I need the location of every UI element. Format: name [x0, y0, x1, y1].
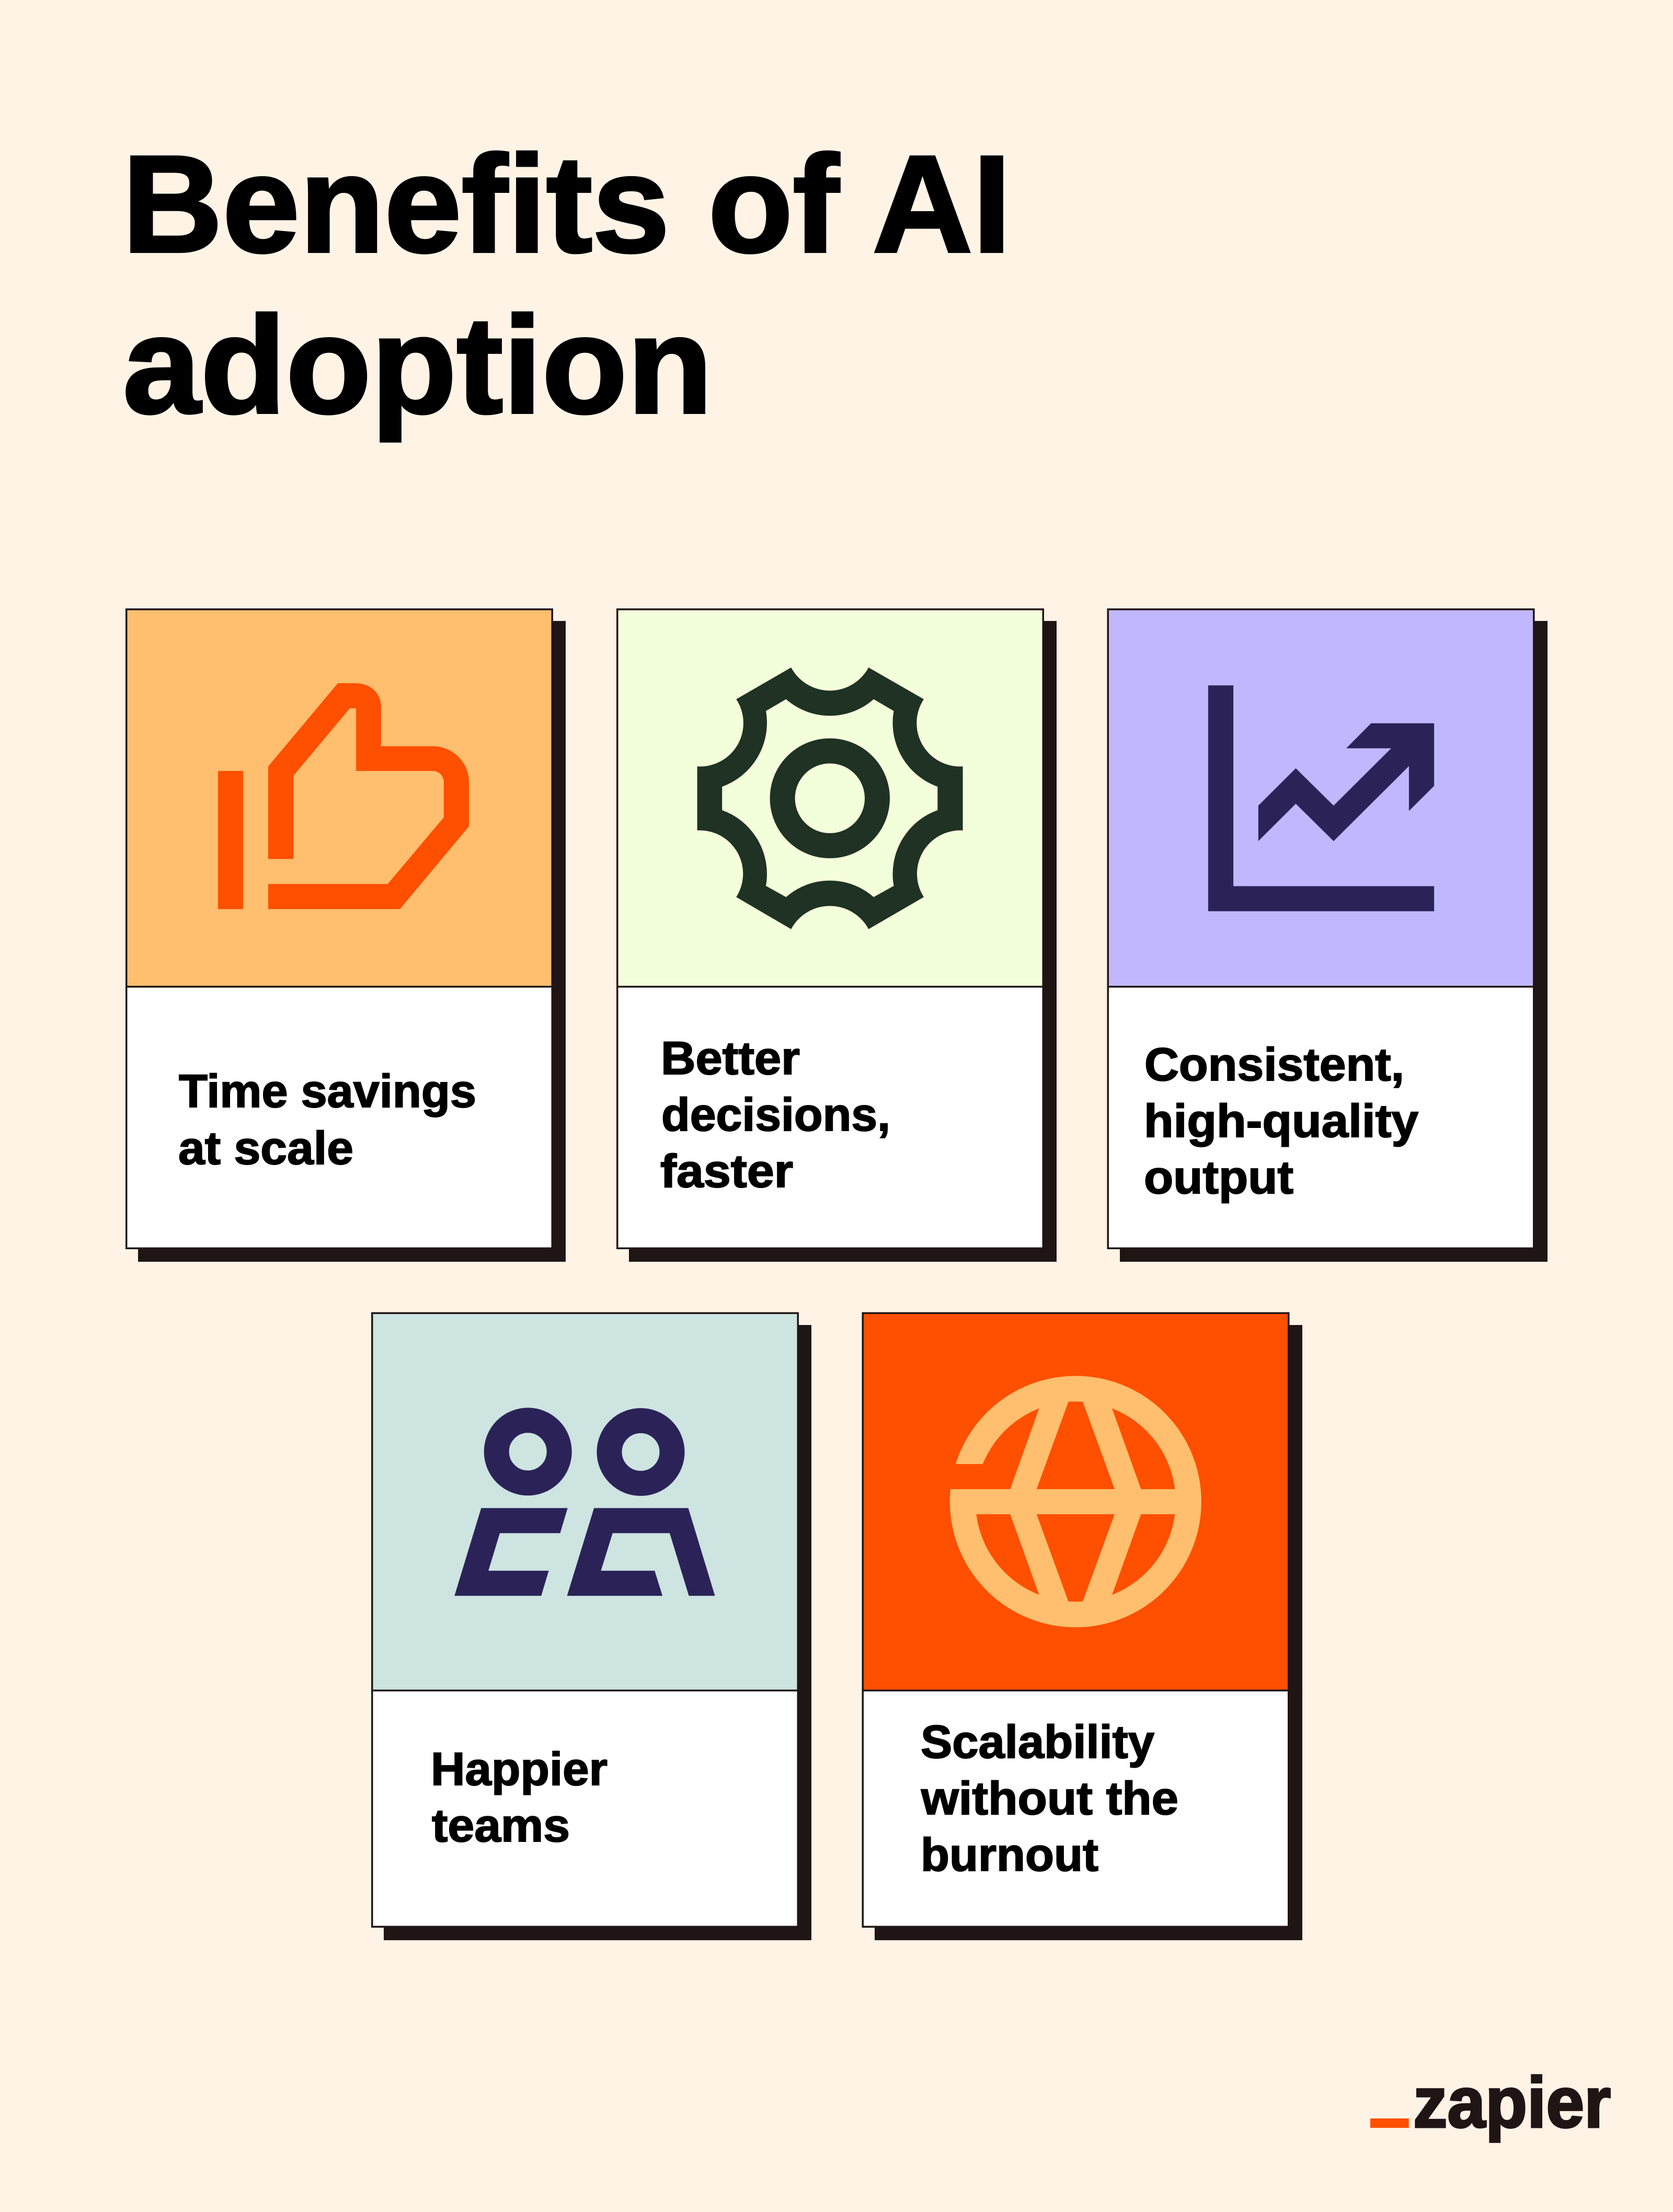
label: better decisions, faster: decisions,: [661, 1088, 890, 1140]
panel: scalability without the burnout: [863, 1313, 1302, 1940]
label: consistent, high-quality output: high-quality: [1144, 1095, 1419, 1147]
label: scalability without the burnout: [921, 1715, 1178, 1881]
icon: gear: [697, 667, 963, 929]
icon: growth chart: [1208, 685, 1434, 911]
label: happier teams: Happier: [431, 1743, 608, 1795]
label: consistent, high-quality output: [1144, 1038, 1419, 1203]
logo: zapier: zapier: [1413, 2063, 1611, 2143]
title: [122, 126, 1011, 443]
label: better decisions, faster: [660, 1032, 890, 1197]
title: adoption: [123, 287, 713, 443]
label: scalability without the burnout: burnout: [921, 1828, 1098, 1881]
label: better decisions, faster: Better: [661, 1032, 800, 1084]
panel: happier teams: [372, 1313, 811, 1940]
label: scalability without the burnout: Scalability: [921, 1715, 1155, 1768]
icon: two people: [454, 1420, 715, 1596]
label: consistent, high-quality output: Consistent,: [1144, 1038, 1404, 1090]
label: better decisions, faster: faster: [660, 1145, 793, 1197]
panel: consistent, high-quality output: [1108, 609, 1548, 1262]
icon: thumbs up: [218, 683, 469, 909]
label: time savings at scale: at scale: [178, 1122, 353, 1174]
panel: time savings at scale: [127, 609, 566, 1262]
label: consistent, high-quality output: output: [1144, 1151, 1293, 1203]
label: happier teams: [431, 1743, 608, 1851]
icon: globe: [950, 1376, 1201, 1627]
panel: better decisions, faster: [617, 609, 1057, 1262]
label: scalability without the burnout: without the: [921, 1772, 1178, 1824]
label: time savings at scale: [178, 1065, 476, 1174]
title: Benefits of AI: [122, 126, 1011, 281]
label: happier teams: teams: [432, 1799, 570, 1851]
label: time savings at scale: Time savings: [179, 1065, 476, 1117]
